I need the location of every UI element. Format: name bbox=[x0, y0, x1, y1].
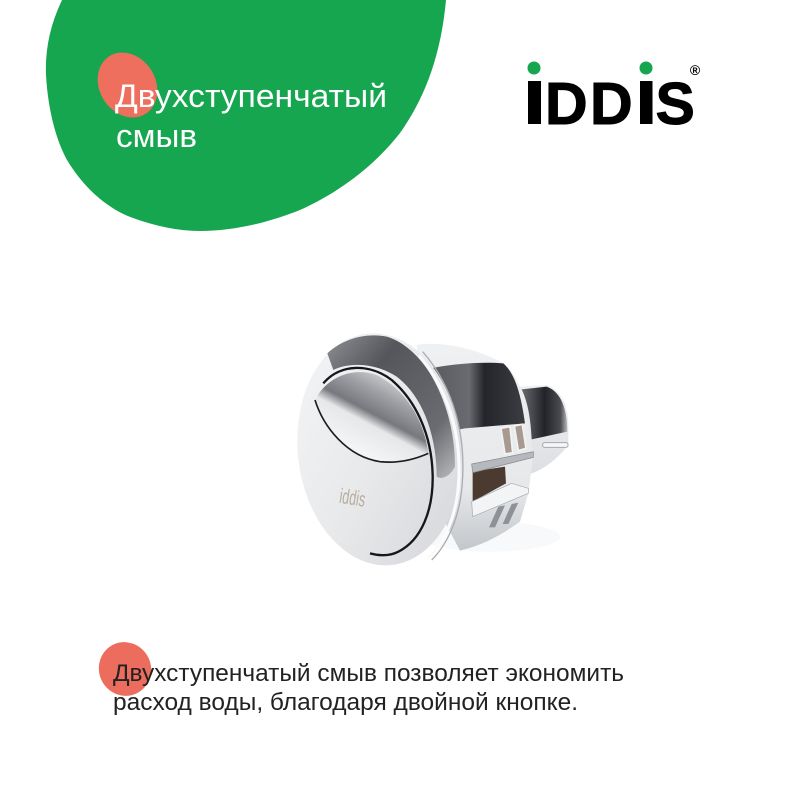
logo: IDDIS: S bbox=[656, 71, 695, 137]
rear neck bbox=[517, 385, 568, 477]
panel: green heading blob bbox=[46, 0, 446, 231]
flange and button face bbox=[286, 325, 473, 574]
flange bright rim bbox=[419, 356, 459, 558]
housing dark band bbox=[423, 363, 525, 433]
coral accent: description bbox=[90, 634, 160, 704]
logo: IDDIS: ® bbox=[690, 62, 701, 78]
neck slot bbox=[543, 443, 568, 447]
heading: Двухступенчатый bbox=[115, 78, 387, 114]
flange dark reflection bbox=[327, 335, 455, 478]
button outlines bbox=[323, 368, 433, 555]
logo: IDDIS: D bbox=[590, 71, 633, 137]
heading: смыв bbox=[116, 118, 197, 154]
product photo: chrome flush button bbox=[286, 325, 568, 574]
upper button bbox=[315, 372, 428, 462]
lower slots bbox=[489, 505, 505, 527]
neck dark band bbox=[522, 387, 567, 439]
coral accent: heading bbox=[86, 41, 169, 129]
housing opening bbox=[473, 467, 506, 502]
description text: расход воды, благодаря двойной кнопке. bbox=[113, 689, 578, 716]
upper slots bbox=[501, 427, 513, 454]
description text: Двухступенчатый смыв позволяет экономить bbox=[113, 660, 624, 687]
housing clip bbox=[472, 452, 533, 473]
soft shadow bbox=[420, 522, 560, 552]
flange outer edge shade bbox=[423, 352, 463, 560]
housing bbox=[417, 344, 533, 551]
logo: IDDIS bbox=[528, 62, 701, 137]
engraved logo: iddis bbox=[338, 484, 368, 512]
logo: IDDIS: D bbox=[545, 71, 588, 137]
